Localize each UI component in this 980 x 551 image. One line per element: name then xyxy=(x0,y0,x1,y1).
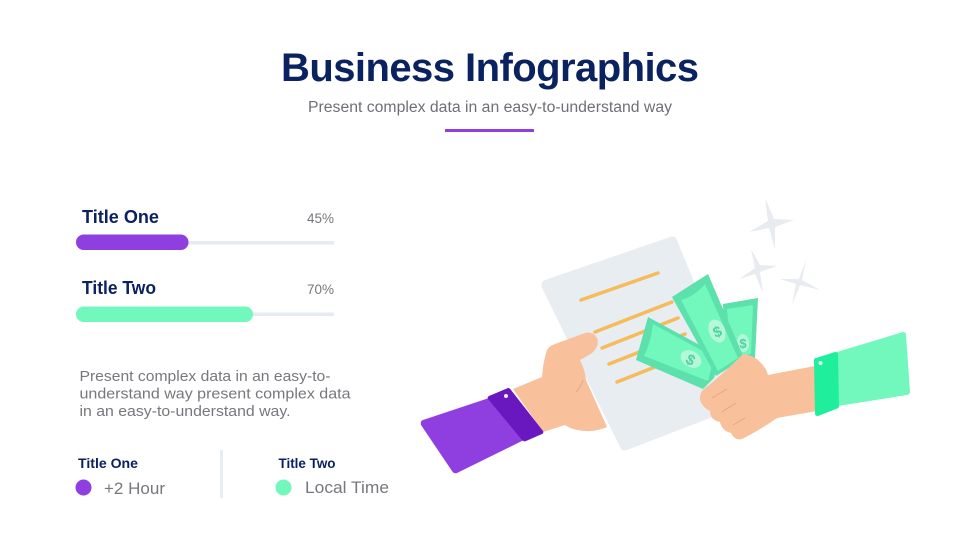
right cuff xyxy=(814,352,839,416)
banknote: left: $ xyxy=(682,351,699,370)
cuff button xyxy=(504,394,508,398)
progress: title one xyxy=(76,206,334,250)
icon: sparkle stars xyxy=(739,198,820,305)
subtitle: Present complex data in an easy-to-understand way xyxy=(308,99,672,116)
bar: 45% xyxy=(76,234,188,250)
bar: 70% xyxy=(76,306,253,322)
document xyxy=(541,236,744,451)
description text: understand way present complex data xyxy=(80,386,351,402)
description text: Present complex data in an easy-to- xyxy=(80,368,331,385)
legend: title one xyxy=(76,455,165,498)
document text lines xyxy=(581,273,693,382)
heading: title one: Title One xyxy=(82,206,159,227)
legend: title two xyxy=(276,455,389,497)
value: 70%: 70% xyxy=(307,281,334,297)
track xyxy=(76,312,334,316)
left sleeve xyxy=(421,396,528,473)
left hand xyxy=(513,333,607,432)
illustration: hands exchanging document and money xyxy=(421,198,910,473)
banknote: middle xyxy=(672,274,744,376)
banknote: left xyxy=(636,317,720,389)
legend dot xyxy=(76,480,92,496)
legend heading: Title One xyxy=(78,455,138,471)
right sleeve xyxy=(837,332,910,406)
progress: title two xyxy=(76,277,334,322)
right hand xyxy=(700,354,817,439)
legend dot xyxy=(276,480,292,496)
description text: in an easy-to-understand way. xyxy=(80,403,290,420)
banknote: right xyxy=(723,298,758,360)
legend value: Local Time xyxy=(305,478,389,497)
legend value: +2 Hour xyxy=(104,479,165,498)
description text xyxy=(80,368,351,420)
title underline xyxy=(445,129,534,132)
cuff button xyxy=(818,361,822,365)
track xyxy=(76,241,334,244)
value: 45%: 45% xyxy=(307,210,334,226)
heading: title two: Title Two xyxy=(82,277,156,298)
left cuff xyxy=(488,388,543,441)
title: Business Infographics xyxy=(281,46,699,90)
banknote: right: $ xyxy=(739,336,747,351)
legend heading: Title Two xyxy=(278,455,336,471)
banknote: middle: $ xyxy=(711,323,725,342)
